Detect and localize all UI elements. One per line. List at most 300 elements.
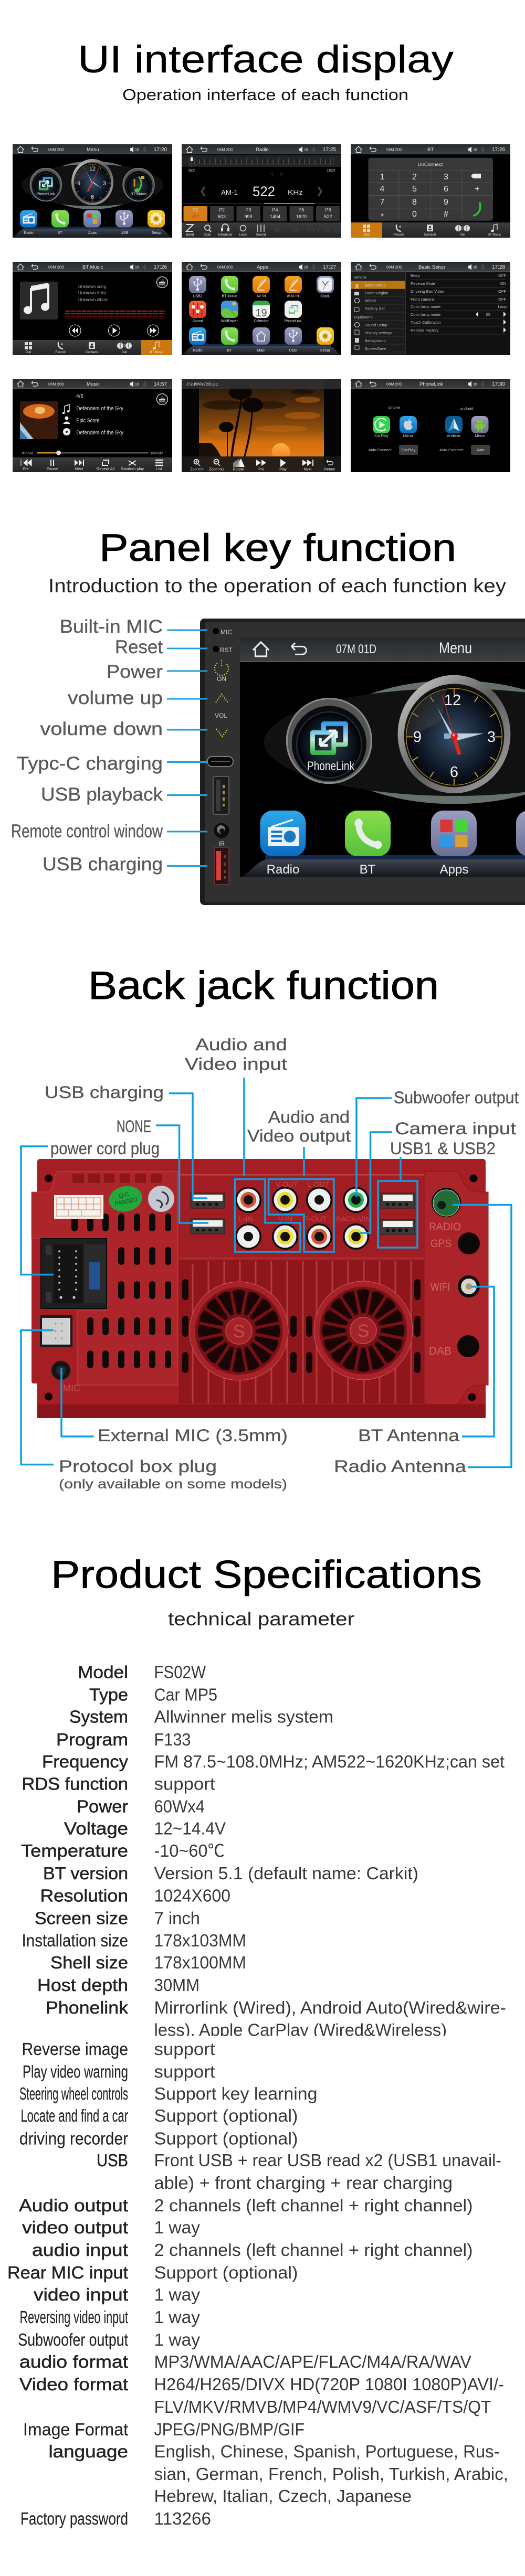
screen: Menu: PhoneLink: [36, 191, 55, 196]
screen: BT dial pad: *: [381, 212, 384, 221]
window: IR: [214, 823, 229, 838]
section: UI interface display: [13, 38, 510, 472]
screen: BT dial pad: 3: [444, 173, 448, 182]
fan 2: [314, 1281, 413, 1380]
spec values: Allwinner melis system: [154, 1707, 333, 1726]
screen: Radio: Sound: [256, 233, 266, 237]
screen: Menu: 06M 20D: [48, 147, 65, 152]
screen: Apps: Calendar: [254, 320, 269, 323]
spec values: 30MM: [154, 1975, 200, 1995]
screen: Menu: BT Music: [130, 191, 147, 196]
screen: BT Music: Unknown Artist: [78, 291, 107, 295]
screen: Menu: Radio: [24, 231, 34, 235]
device front panel: ON: [217, 675, 226, 683]
screen: Apps: USB: [289, 349, 297, 353]
screen: Apps: Setup: [320, 349, 330, 353]
screen: Radio: Band: [186, 233, 194, 237]
spec values: support: [154, 2039, 215, 2059]
screen: Apps: PhoneLink: [284, 320, 302, 323]
screen: PhoneLink: iphone: [388, 405, 400, 410]
spec labels: Locate and find a car: [21, 2106, 128, 2125]
screen: BT dial pad: 5: [412, 185, 417, 194]
mic jack: [51, 1361, 70, 1380]
spec values: Support (optional): [154, 2106, 298, 2125]
spec labels: Type: [89, 1685, 128, 1704]
screen: Apps: 10: [304, 266, 308, 270]
screen: BT dial pad: 9: [444, 198, 448, 207]
screen: Basic Setup: Beep: [411, 273, 420, 278]
spec values: able) + front charging + rear charging: [154, 2173, 453, 2192]
screen: Menu: 9: [77, 180, 80, 187]
embossed jack labels: V-OUT: [276, 1180, 298, 1188]
panel screen: PhoneLink: [307, 759, 355, 773]
screen: BT dial pad: 2: [412, 173, 417, 182]
spec values: 12~14.4V: [154, 1819, 226, 1838]
panel screen: Menu: [439, 640, 472, 657]
embossed jack labels: R-OUT: [303, 1215, 327, 1223]
callout labels: power cord plug: [50, 1139, 160, 1158]
sticker: QC passed: PASSED: [114, 1196, 138, 1207]
screen: Radio: KHz: [288, 188, 303, 196]
screen: BT Music: 10: [135, 266, 139, 270]
spec values: -10~60℃: [154, 1841, 225, 1860]
spec labels: Shell size: [50, 1953, 128, 1972]
screen: BT Music: BT Music: [82, 264, 103, 270]
screen: Photo viewer: Return: [324, 468, 335, 471]
screen: Music: Music: [87, 381, 100, 387]
spec values: English, Chinese, Spanish, Portuguese, Rus-: [154, 2442, 500, 2461]
screen: Basic Setup: Tuner Region: [364, 291, 388, 295]
screen: Radio: Scan: [204, 233, 212, 237]
screen: Radio: 522: [191, 214, 200, 219]
callout labels: Subwoofer output: [394, 1088, 519, 1107]
screen: Apps: BT: [227, 349, 232, 353]
callout labels: Radio Antenna: [334, 1457, 466, 1476]
panel screen: Radio: [267, 863, 299, 877]
spec labels: Screen size: [35, 1909, 128, 1928]
screen: Menu: BT: [58, 231, 62, 235]
screen: BT dial pad: 17:26: [492, 147, 505, 153]
screen: Basic Setup: Display settings: [364, 331, 392, 335]
screen: Menu: 17:20: [154, 147, 167, 153]
screen: Photo viewer: Zoom in: [190, 468, 204, 471]
screen: BT Music: Unknown album: [78, 297, 109, 302]
callout labels: Video output: [247, 1126, 351, 1145]
key: volume up: [216, 694, 228, 702]
screen: Photo viewer: Play: [279, 468, 287, 471]
screen: BT Music: Pair: [122, 351, 127, 354]
title: UI interface display: UI interface display: [78, 38, 454, 81]
embossed jack labels: BACK-VIN: [336, 1215, 371, 1223]
spec labels: driving recorder: [19, 2129, 128, 2148]
clock hands: [437, 695, 484, 754]
fan 1: [190, 1282, 288, 1380]
screen: Radio: 1404: [270, 214, 280, 219]
spec labels: USB: [97, 2151, 128, 2170]
screen: Apps: AUX IN: [287, 295, 299, 299]
screen: Radio: P3: [245, 207, 251, 212]
callout labels: Camera input: [395, 1119, 516, 1138]
screen: Basic Setup: 05: [486, 312, 490, 317]
screen: Radio: 522: [324, 214, 332, 219]
left cover plate: [32, 1172, 177, 1385]
callout labels: Reset: [115, 637, 163, 657]
title: Back jack function: Back jack function: [88, 963, 439, 1007]
spec values: 113266: [154, 2509, 211, 2528]
screen: Radio: PTY: [307, 226, 320, 234]
screen: BT dial pad: +: [475, 185, 480, 194]
screen: Music: [13, 379, 172, 472]
screen: PhoneLink: PhoneLink: [419, 381, 443, 387]
screen: Radio: 1620: [296, 214, 307, 219]
screen: PhoneLink: CarPlay: [374, 433, 388, 438]
screen: PhoneLink: Auto Connect:: [369, 448, 393, 452]
spec values: Hebrew, Italian, Czech, Japanese: [154, 2486, 412, 2506]
screen: Basic Setup: Basic Setup: [418, 264, 445, 270]
screen: Basic Setup: Wheel: [364, 299, 376, 303]
screen: Music: Random play: [121, 466, 144, 471]
top notches: [72, 1174, 162, 1183]
key: volume down: [216, 729, 228, 737]
screen: Radio: 522: [188, 169, 195, 173]
screen: Apps: USB2: [193, 295, 203, 299]
screen: Apps: 17:27: [323, 264, 336, 270]
key: power: [215, 660, 228, 675]
spec labels: Image Format: [23, 2420, 128, 2439]
callout lines: [21, 1078, 511, 1467]
callout labels: Video input: [185, 1055, 287, 1073]
spec values: Support key learning: [154, 2084, 317, 2103]
spec values: support: [154, 1774, 215, 1794]
screen: Basic Setup: Restore Factory: [411, 328, 439, 333]
screen: BT dial pad: 6: [444, 185, 448, 194]
spec labels: [7, 1663, 129, 2528]
screen: BT Music: Record: [55, 351, 66, 354]
port: usb charging: [214, 847, 229, 885]
screen: Music: Next: [75, 466, 83, 471]
spec values: 2 channels (left channel + right channel): [154, 2196, 473, 2215]
screen: Basic Setup: Color lamp mode: [411, 304, 440, 309]
spec labels: Installation size: [22, 1931, 128, 1950]
callout labels: External MIC (3.5mm): [98, 1426, 288, 1445]
spec labels: Host depth: [37, 1975, 128, 1995]
subtitle: operation interface: Operation interface of each function: [122, 86, 408, 104]
screen: Apps: 19: [255, 307, 267, 319]
device front panel: [200, 619, 525, 905]
spec values: Mirrorlink (Wired), Android Auto(Wired&wire-: [154, 1998, 506, 2017]
embossed jack labels: L-IN: [239, 1215, 253, 1223]
screen: Radio: AF: [274, 226, 282, 234]
screen: Menu: 10: [135, 148, 139, 152]
spec labels: Reversing video input: [20, 2307, 128, 2327]
screen: Radio: P5: [298, 207, 304, 212]
screen: Radio: [182, 144, 341, 238]
spec values: 2 channels (left channel + right channel): [154, 2240, 473, 2260]
clock numerals: 6: [450, 764, 458, 781]
device front panel: IR: [218, 840, 225, 847]
callout labels: volume down: [40, 719, 163, 739]
callout labels: USB charging: [43, 854, 163, 875]
screen: Music: Pre: [23, 466, 29, 471]
embossed antenna labels: [429, 1221, 461, 1357]
spec values: Front USB + rear USB read x2 (USB1 unavail-: [154, 2151, 501, 2170]
screen: Basic Setup: Loop: [498, 304, 507, 309]
screen: BT dial pad: UnConnect: [418, 162, 443, 168]
spec labels: video input: [34, 2285, 128, 2304]
screen: BT dial pad: 0: [412, 210, 417, 219]
screen: Radio: P4: [272, 207, 278, 212]
screen: Radio: Local: [239, 233, 247, 237]
screen: Apps: [182, 262, 341, 355]
screen: Photo viewer: Rotate: [233, 468, 244, 471]
screen: BT dial pad: [351, 144, 510, 238]
screen: Radio: 999: [244, 214, 253, 219]
screen: Radio: Q: [280, 173, 283, 176]
title: Panel key function: Panel key function: [99, 527, 456, 569]
screen: BT dial pad: 1: [380, 173, 385, 182]
protocol connector: [40, 1315, 72, 1347]
screen: Radio: 17:25: [323, 147, 336, 153]
fan 2: S: [358, 1321, 369, 1341]
screen: BT Music: [13, 262, 172, 355]
clock numerals: 9: [413, 729, 422, 746]
screen: Basic Setup: OFF: [498, 289, 506, 294]
red rear unit: [32, 1159, 488, 1418]
panel screen: Apps: [440, 863, 468, 877]
screen: PhoneLink: 10: [473, 383, 477, 387]
spec values: 1 way: [154, 2330, 200, 2349]
screen: Apps: Radio: [193, 349, 203, 353]
callout labels: volume up: [68, 688, 163, 708]
spec labels: Phonelink: [46, 1998, 129, 2017]
spec values: 60Wx4: [154, 1796, 205, 1816]
section: Back jack function: [21, 963, 519, 1492]
screen: PhoneLink: 17:30: [492, 381, 505, 387]
spec values: Car MP5: [154, 1685, 217, 1704]
screen: Radio: P1: [192, 207, 198, 212]
spec labels: language: [48, 2442, 128, 2461]
spec labels: Frequency: [42, 1752, 129, 1771]
screen: PhoneLink: Mirror: [403, 433, 414, 438]
spec labels: Subwoofer output: [18, 2330, 128, 2349]
spec values: F133: [154, 1730, 191, 1749]
screen: BT dial pad: BT: [427, 147, 434, 153]
screen: Radio: 1620: [327, 169, 335, 173]
callout labels: Built-in MIC: [60, 616, 163, 637]
panel screen: 07M 01D: [336, 642, 376, 656]
screen: BT dial pad: #: [444, 210, 448, 219]
screen: Basic Setup: ScreenSave: [364, 346, 386, 351]
port: usb playback: [213, 776, 229, 814]
screen: PhoneLink: 06M 20D: [386, 382, 403, 387]
screen: Radio: Introduce: [218, 233, 233, 237]
dock: [243, 855, 525, 877]
screen: BT dial pad: Record: [393, 233, 404, 237]
screen: Basic Setup: Touch Calibration: [411, 320, 441, 325]
spec labels: audio input: [32, 2240, 128, 2260]
spec values: FS02W: [154, 1663, 206, 1682]
screen: Menu: [13, 144, 172, 238]
power connector: [41, 1239, 107, 1308]
key: MIC: [213, 628, 232, 636]
screen: BT dial pad: 4: [380, 185, 385, 194]
screen: BT dial pad: 8: [412, 198, 417, 207]
spec labels: Program: [56, 1730, 128, 1749]
callout labels: USB1 & USB2: [390, 1139, 496, 1158]
screen: Music: 0:00:33: [22, 451, 34, 455]
clock numerals: 3: [487, 729, 496, 746]
screen: Radio: P2: [219, 207, 225, 212]
screen: BT dial pad: 10: [473, 148, 477, 152]
screen: Apps: AV IN: [257, 295, 266, 299]
screen: BT Music: Unknown song: [78, 284, 106, 289]
spec labels: Rear MIC input: [7, 2263, 128, 2282]
screen: PhoneLink: android: [460, 407, 474, 411]
fan 1: S: [233, 1322, 245, 1342]
rca jacks: [235, 1187, 369, 1250]
gps wifi dab holes: [457, 1232, 480, 1357]
callout labels: Typc-C charging: [17, 753, 163, 774]
screen: PhoneLink: [351, 379, 510, 472]
panel screen: [240, 637, 525, 877]
spec values: 1 way: [154, 2218, 200, 2237]
spec values: FLV/MKV/RMVB/MP4/WMV9/VC/ASF/TS/QT: [154, 2397, 491, 2417]
spec labels: BT version: [43, 1864, 128, 1883]
spec values: MP3/WMA/AAC/APE/FLAC/M4A/RA/WAV: [154, 2352, 471, 2371]
callout labels: USB charging: [45, 1083, 164, 1102]
screen: Radio: 10: [304, 148, 308, 152]
embossed antenna labels: WIFI: [430, 1281, 450, 1293]
embossed jack labels: V-IN: [278, 1215, 292, 1223]
screen: Radio: 06M 20D: [217, 147, 234, 152]
screen: Photo viewer: Pre: [258, 468, 264, 471]
fin area: [179, 1257, 424, 1403]
clock numerals: 12: [444, 692, 461, 709]
screen: Basic Setup: Basic Setup: [364, 283, 386, 288]
screen: Radio: 522: [253, 184, 275, 199]
screen: Menu: Apps: [88, 231, 97, 235]
callout labels: Audio and: [195, 1035, 287, 1054]
embossed jack labels: L-OUT: [307, 1180, 329, 1188]
screen: BT dial pad: 06M 20D: [386, 147, 403, 152]
screen: Photo viewer: Zoom out: [209, 468, 225, 471]
screen: Menu: 6: [91, 194, 94, 200]
screen: Basic Setup: 17:28: [492, 264, 505, 270]
screen: Photo viewer: J:\2-[960x720].jpg: [186, 382, 218, 386]
sticker: QC passed: Q.C.: [118, 1191, 131, 1199]
spec labels: Play video warning: [23, 2062, 128, 2081]
screen: PhoneLink: CarPlay: [402, 448, 416, 452]
screen: Basic Setup: Factory Set: [364, 306, 385, 311]
spec values: 178x100MM: [154, 1953, 246, 1972]
screen: Music: 10: [135, 383, 139, 387]
spec values: 1024X600: [154, 1886, 230, 1906]
embossed antenna labels: GPS: [430, 1238, 452, 1250]
screen: Music: 06M 20D: [48, 382, 65, 387]
spec values: Support (optional): [154, 2129, 298, 2148]
key: RST: RST: [220, 646, 233, 654]
screen: Basic Setup: Background: [364, 338, 386, 343]
red rear unit: MIC: [63, 1383, 80, 1393]
screen: Music: Defenders of the Sky: [77, 406, 123, 412]
screen: BT Music: 06M 20D: [48, 265, 65, 270]
callout labels: (only available on some models): [59, 1477, 287, 1492]
right cover plate: [424, 1172, 488, 1404]
spec labels: Factory password: [20, 2509, 128, 2528]
screen: Basic Setup: 10: [473, 266, 477, 270]
callout labels: Protocol box plug: [59, 1457, 217, 1476]
screen: Music: 14:57: [154, 381, 167, 387]
radio jack: [432, 1188, 461, 1217]
screen: Music: 4/6: [76, 393, 83, 399]
device front panel: VOL: [215, 712, 227, 719]
screen: Apps: Sound: [192, 320, 203, 323]
sticker: pinout: [54, 1195, 103, 1219]
spec values: [154, 1663, 508, 2528]
screen: Radio: AM-1: [221, 188, 238, 196]
spec values: less), Apple CarPlay (Wired&Wireless): [154, 2020, 447, 2040]
section: Panel key function: [11, 527, 525, 905]
usb ports: [191, 1193, 415, 1234]
screen: Menu: 3: [103, 180, 106, 187]
embossed antenna labels: DAB: [429, 1345, 452, 1357]
screen: Apps: WallPaper: [221, 320, 238, 323]
spec labels: Reverse image: [22, 2039, 128, 2059]
screen: Basic Setup: OFF: [498, 297, 506, 302]
callout labels: NONE: [117, 1117, 151, 1136]
screen: Apps: Apps: [257, 264, 268, 270]
screen: PhoneLink: Android: [447, 433, 460, 438]
spec values: JPEG/PNG/BMP/GIF: [154, 2420, 304, 2439]
spec labels: Steering wheel controls: [19, 2084, 128, 2103]
spec labels: Voltage: [64, 1819, 128, 1838]
screen: Basic Setup: Front camera: [411, 297, 434, 302]
subtitle: technical parameter: technical parameter: [168, 1608, 354, 1630]
spec labels: Resolution: [40, 1886, 128, 1906]
embossed jack labels: [239, 1180, 371, 1223]
screen: Basic Setup: Color lamp mode: [411, 312, 440, 317]
callout lines: [167, 630, 207, 866]
spec values: H264/H265/DIVX HD(720P 1080I 1080P)AVI/-: [154, 2375, 504, 2394]
title: Product Specifications: Product Specifications: [51, 1553, 482, 1596]
screen: Music: Pause: [47, 466, 58, 471]
screen: Menu: Menu: [87, 147, 99, 153]
screen: Basic Setup: Sound Setup: [364, 323, 387, 327]
spec labels: audio format: [19, 2352, 128, 2371]
spec values: Version 5.1 (default name: Carkit): [154, 1864, 418, 1883]
screen: Photo viewer: [182, 379, 341, 472]
screen: Radio: TA: [291, 226, 300, 234]
subtitle: function key intro: Introduction to the operation of each function key: [48, 575, 507, 597]
screen: PhoneLink: Auto: [476, 448, 485, 452]
callout labels: [45, 1035, 519, 1492]
screen: Menu: USB: [121, 231, 129, 235]
clock numerals: [413, 692, 496, 781]
spec values: 178x103MM: [154, 1931, 246, 1950]
spec labels: video output: [22, 2218, 128, 2237]
spec values: 1 way: [154, 2285, 200, 2304]
screen: Basic Setup: [351, 262, 510, 355]
screen: BT Music: Dial: [26, 351, 31, 354]
spec values: FM 87.5~108.0MHz; AM522~1620KHz;can set: [154, 1752, 505, 1771]
screen: BT dial pad: BT Music: [488, 233, 501, 237]
rca block background: [179, 1175, 424, 1257]
screen: Radio: Radio: [256, 147, 269, 153]
spec values: sian, German, French, Polish, Turkish, Arabic,: [154, 2464, 508, 2484]
screen: BT dial pad: 7: [380, 198, 385, 207]
screen: Basic Setup: Vehicle: [354, 275, 366, 280]
spec labels: RDS function: [22, 1774, 128, 1794]
